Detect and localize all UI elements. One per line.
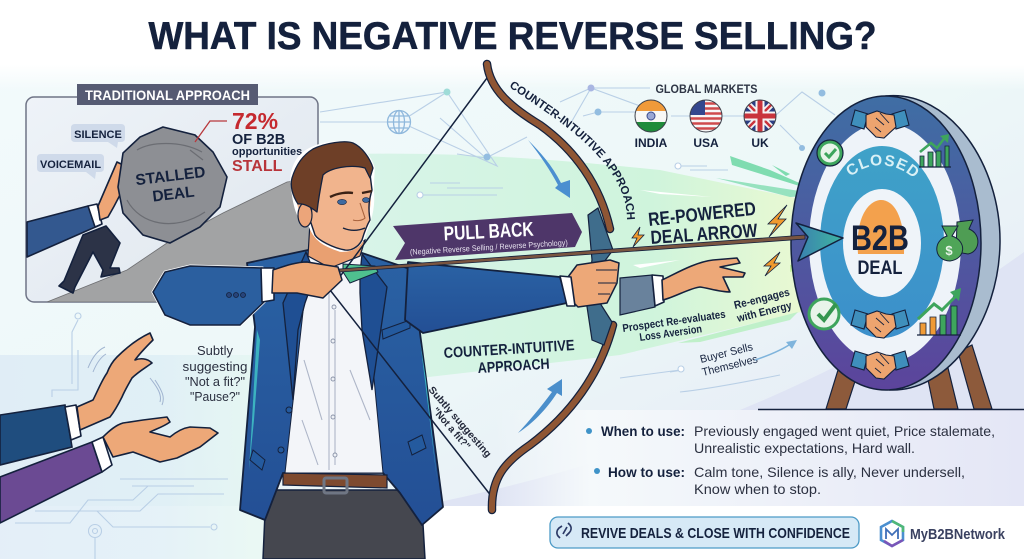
target easel legs [758,345,1024,410]
counter-intuitive arrow blue curve [528,140,570,198]
speech bubble: silence: SILENCE [74,129,122,141]
speed streaks: green arrow energy [633,156,835,343]
upper hand [77,333,153,430]
target rim [886,96,1000,390]
counter-intuitive approach lower label: APPROACH [477,356,550,377]
blue ring [820,146,944,338]
counter-intuitive approach upper label: COUNTER-INTUITIVE APPROACH [510,82,635,220]
counter-intuitive approach lower label [443,337,575,377]
jacket body [240,250,443,525]
flag: uk: UK [751,136,769,150]
shirt placket [302,290,370,470]
upper cuff [65,405,81,440]
callout: 72 percent stall [195,108,302,175]
heading: re-powered deal arrow [647,199,758,249]
panel: traditional approach [26,84,318,302]
subtly suggesting note: "Not a fit?" [185,375,245,389]
circuit decoration [15,313,228,559]
shirt buttons [331,305,337,457]
icon: handshake top [851,110,909,138]
flag: india [635,100,668,150]
when and how to use: How to use: [608,464,685,480]
labels along streaks [622,286,794,379]
bow string [330,78,492,497]
target: closed b2b deal [790,94,1001,391]
closed label [846,154,918,176]
icon: money bags [937,220,978,261]
when and how to use: Unrealistic expectations, Hard wall. [694,440,915,456]
bow [330,64,613,510]
subtle text on string: "Not a fit?" [430,406,472,452]
labels along streaks: Buyer Sells [699,341,755,366]
upper sleeve [0,405,72,465]
right hand fingers [596,270,617,294]
speech bubble: silence [71,124,125,148]
callout: 72 percent stall: 72% [232,108,278,134]
subtly suggesting note: "Pause?" [190,390,240,404]
flag: usa [690,100,722,150]
heading: re-powered deal arrow: RE-POWERED [647,199,757,231]
right hand [568,260,619,307]
icon: handshake bottom [851,351,909,379]
title: WHAT IS NEGATIVE REVERSE SELLING? [148,15,876,58]
lower hand [103,417,218,462]
sleeve buttons [226,292,246,298]
pull back banner: PULL BACK [443,219,535,245]
right cuff [560,276,575,306]
belt [283,473,387,493]
icon: lightning bolts [632,205,787,276]
when and how to use: Calm tone, Silence is ally, Never undersell, [694,464,965,480]
labels along streaks: Prospect Re-evaluates [622,309,726,335]
when and how to use: Know when to stop. [694,481,821,497]
presenter man [153,142,567,559]
button: revive deals [550,517,859,548]
icon: handshake mid [851,310,909,338]
flag: india: INDIA [635,136,668,150]
lapels [283,252,387,400]
pushing man [27,162,128,293]
right sleeve [405,262,567,333]
when and how to use: When to use: [601,423,685,439]
flag: uk [744,100,776,150]
labels along streaks: with Energy [735,300,794,325]
speech bubble: voicemail: VOICEMAIL [40,159,101,171]
icon: globe [388,110,410,134]
deal label: DEAL [858,258,903,279]
pull back banner [393,213,582,260]
labels along streaks: Themselves [701,353,759,379]
icon: growth chart top [919,134,951,167]
global markets: GLOBAL MARKETS [656,82,758,96]
pull back banner: (Negative Reverse Selling / Reverse Psychology) [410,238,568,257]
when and how to use: Previously engaged went quiet, Price stalemate, [694,423,995,439]
callout: 72 percent stall: STALL [232,158,283,175]
orange bullseye [858,200,904,254]
heading: re-powered deal arrow: DEAL ARROW [650,221,758,249]
when and how band [495,410,1024,506]
reaching hand right [620,258,745,315]
left sleeve outline [153,266,266,325]
jacket teal highlights [249,330,437,480]
subtly suggesting note [182,344,248,404]
ear [298,203,312,227]
fletching [343,264,378,283]
face [310,158,372,250]
icon: check bottom [809,299,839,329]
subtle text on string: Subtly suggesting [426,385,493,460]
pocket and buttons [250,320,426,470]
icon: growth chart bottom [917,288,961,335]
label: traditional approach: TRADITIONAL APPROACH [85,87,250,103]
boulder: STALLED [135,164,206,189]
labels along streaks: Re-engages [733,286,791,312]
white ring [809,123,961,363]
inner disc [843,189,921,297]
hair [291,142,373,212]
icon: money bags: $ [945,243,953,258]
boulder: DEAL [151,184,195,206]
global markets [635,82,776,150]
head halo [292,143,373,250]
left cuff [261,268,274,302]
closed label: CLOSED [846,154,918,176]
logo: myb2bnetwork: MyB2BNetwork [910,527,1006,543]
logo: myb2bnetwork [881,521,1006,546]
blue up arrow [518,379,562,433]
shirt [285,253,383,473]
left hand [272,262,342,298]
lower cuff [92,437,112,472]
pants [263,490,425,559]
subtly suggesting note: Subtly [197,344,234,358]
bow riser [586,208,613,345]
network lines decoration [320,84,835,392]
small blue arrow [755,340,797,360]
flag: usa: USA [693,136,719,150]
speech bubble: voicemail [37,154,104,179]
button: revive deals: REVIVE DEALS & CLOSE WITH CONFIDENCE [581,525,850,542]
hands on bow and string [272,260,619,307]
counter-intuitive approach lower label: COUNTER-INTUITIVE [443,337,575,362]
callout: 72 percent stall: opportunities [232,146,302,158]
icon: check top [817,140,843,166]
subtly suggesting note: suggesting [182,360,248,374]
hill [47,178,318,302]
arrowhead [796,223,843,261]
neck [308,222,365,268]
motion marks [88,347,163,405]
outer ring [791,96,981,390]
when and how to use [586,423,995,497]
b2b label: B2B [851,219,909,258]
boulder [118,127,227,243]
lower sleeve [0,442,102,523]
left sleeve [153,266,266,325]
head [291,142,373,250]
callout: 72 percent stall: OF B2B [232,132,285,148]
arrow shaft [298,235,805,275]
labels along streaks: Loss Aversion [639,323,703,344]
pleading hands [0,333,218,523]
